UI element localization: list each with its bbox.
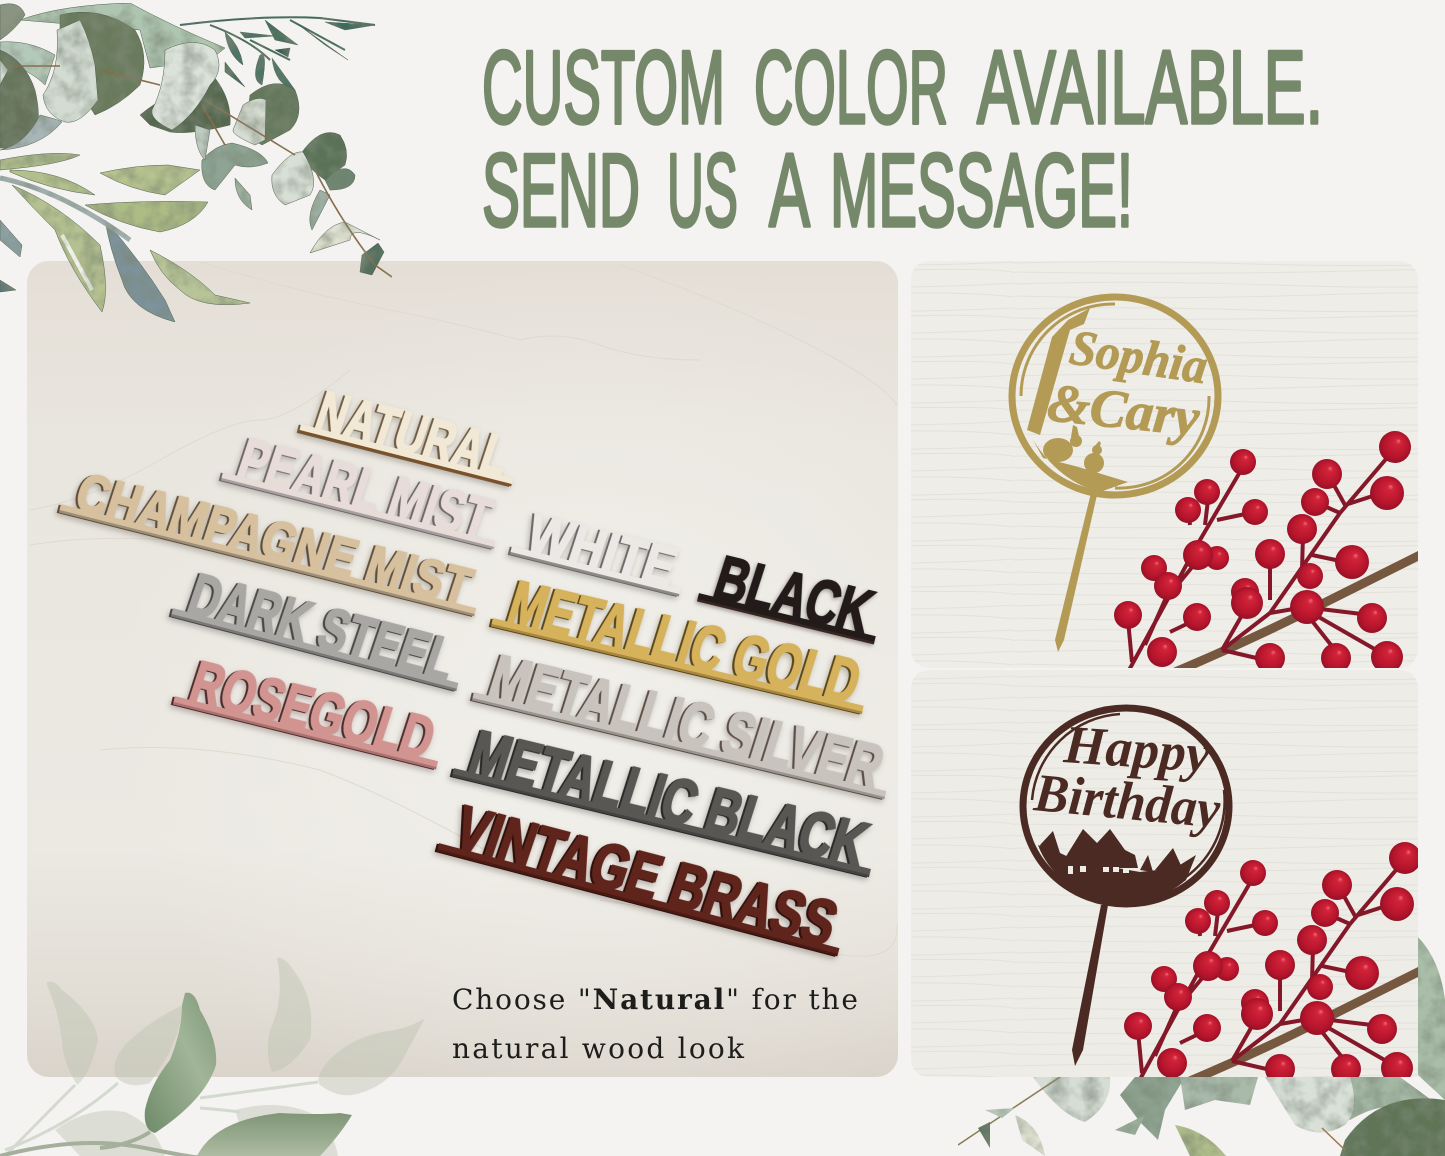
topper ring	[1012, 297, 1218, 495]
title line 1: CUSTOM	[482, 30, 725, 146]
colour label: Dark Steel: DARK STEEL	[180, 561, 464, 693]
red berries	[1124, 842, 1418, 1077]
title line 2	[482, 133, 1133, 249]
colour label: Rosegold	[172, 645, 451, 775]
colour label: White: WHITE	[520, 502, 685, 598]
house and trees scene	[1038, 829, 1196, 904]
colour label: Metallic Silver: METALLIC SILVER	[481, 642, 891, 803]
title line 2: US	[667, 133, 738, 249]
colour label: Dark Steel	[169, 557, 472, 697]
title line 1	[482, 30, 1323, 146]
panel: marble colour samples photo	[27, 261, 899, 1077]
colour label: Natural	[298, 376, 526, 492]
red berries	[1114, 431, 1430, 675]
colour label: Metallic Gold: METALLIC GOLD	[500, 568, 869, 717]
note: natural wood look: natural wood look	[452, 1032, 745, 1065]
colour label: Metallic Gold	[489, 565, 876, 720]
colour label: Rosegold: ROSEGOLD	[183, 649, 443, 772]
colour label: Metallic Black: METALLIC BLACK	[461, 717, 877, 881]
name text second line: &Cary	[1045, 372, 1203, 448]
brown topper: Happy Birthday	[1023, 708, 1229, 1066]
colour label: Natural: NATURAL	[308, 380, 518, 489]
name text: Sophia	[1066, 318, 1211, 394]
colour label: Pearl Mist	[220, 423, 508, 555]
colour label: Vintage Brass	[435, 788, 854, 963]
title	[482, 30, 1323, 249]
colour label: Champagne Mist: CHAMPAGNE MIST	[69, 462, 479, 618]
note: natural wood look	[452, 983, 858, 1065]
panel: brown cake topper photo	[911, 670, 1440, 1086]
title line 2: A	[769, 133, 810, 249]
marble surface	[27, 261, 898, 1077]
title line 2: MESSAGE!	[830, 133, 1133, 249]
birch tree and rabbits	[1027, 308, 1128, 492]
leaves: bottom right corner	[958, 937, 1445, 1156]
topper stick	[1072, 905, 1108, 1066]
leaves: bottom left corner	[0, 958, 425, 1156]
house windows	[1068, 866, 1129, 874]
colour label: Black	[695, 540, 889, 651]
note: natural wood look: Choose "Natural" for the	[452, 983, 858, 1016]
greeting text: Happy	[1061, 714, 1213, 784]
greeting text second line: Birthday	[1031, 762, 1224, 840]
title line 1: COLOR	[754, 30, 948, 146]
colour label: Pearl Mist: PEARL MIST	[231, 427, 500, 551]
colour label: Metallic Black	[450, 713, 884, 884]
colour label: Metallic Silver	[470, 639, 899, 806]
topper stick	[1055, 493, 1097, 652]
title line 2: SEND	[482, 133, 640, 249]
topper ring	[1023, 708, 1229, 904]
colour label: Black: BLACK	[706, 544, 881, 648]
gold topper: Sophia & Cary	[1012, 297, 1218, 652]
leaves: top left corner	[0, 3, 392, 322]
colour label: Vintage Brass: VINTAGE BRASS	[446, 792, 846, 959]
panel: gold cake topper photo	[911, 261, 1430, 675]
